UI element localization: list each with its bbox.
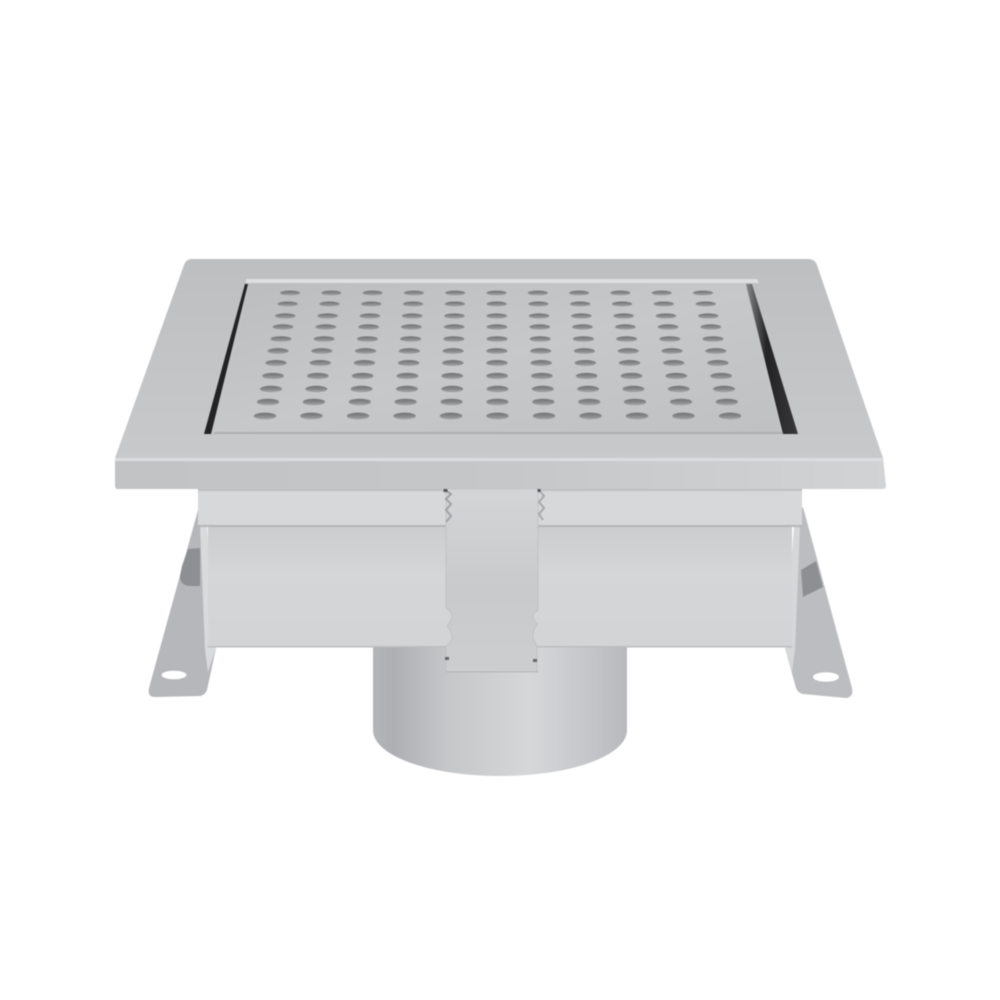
top flange frame — [115, 259, 883, 458]
perforated grate plate — [213, 283, 783, 434]
recess rim — [246, 279, 759, 283]
flange front face — [115, 458, 886, 489]
grate perforations: 11 rows of 11 holes — [254, 291, 741, 419]
recessed body panel — [208, 526, 792, 648]
right drainage slot — [746, 284, 798, 434]
outlet pipe — [373, 640, 627, 776]
right mounting bracket — [785, 499, 852, 698]
left mounting bracket — [149, 510, 216, 697]
left drainage slot — [204, 284, 248, 434]
upper body strip — [198, 487, 802, 527]
centre strap with welded edges — [444, 489, 544, 672]
